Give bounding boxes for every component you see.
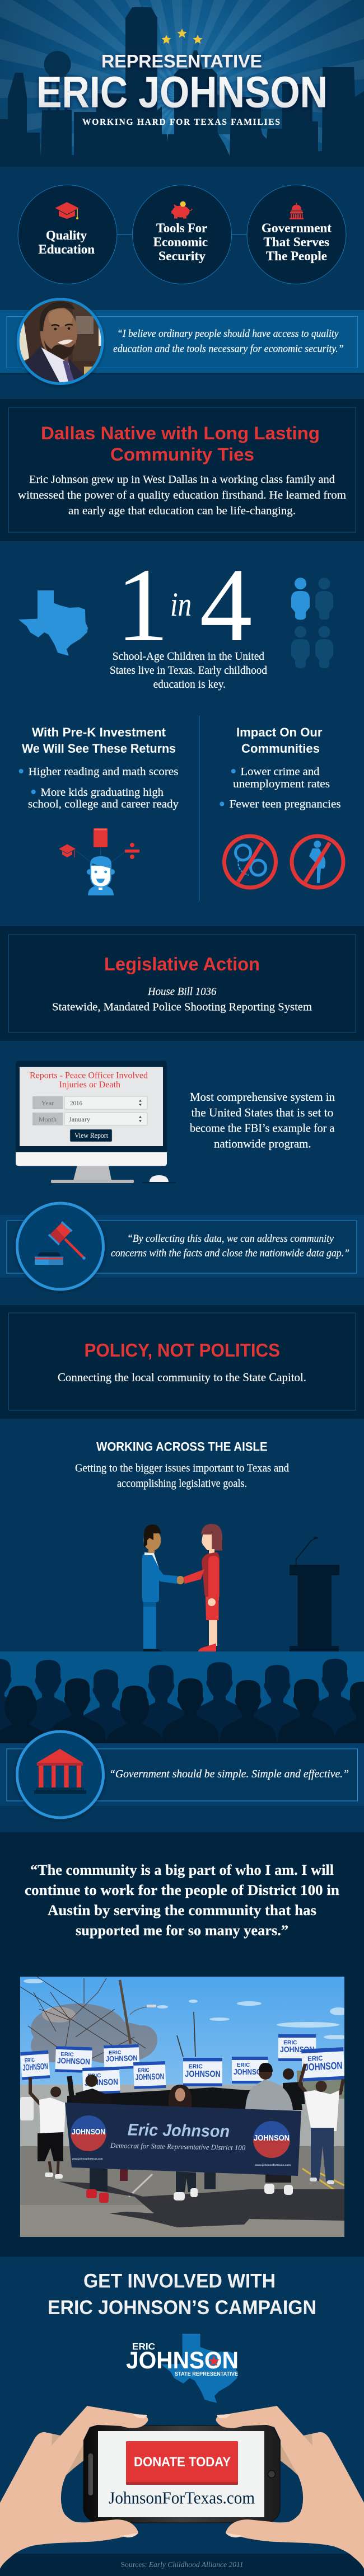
footer strip (0, 2554, 364, 2576)
pillar: government: That Serves (263, 235, 329, 249)
campaign yard signs: ERIC (189, 2063, 203, 2070)
panel: legislative action (0, 926, 364, 1041)
road shadows (59, 2181, 344, 2227)
text: most comprehensive system: nationwide program. (214, 1137, 311, 1151)
title: REPRESENTATIVE (101, 51, 262, 72)
biography text: an early age that education can be life-changing. (68, 505, 296, 517)
campaign yard signs: ERIC (109, 2049, 122, 2056)
statistic caption: School-Age Children in the United (113, 650, 264, 663)
icon: gavel (17, 1203, 103, 1289)
form fields: View Report (74, 1132, 108, 1139)
panel: community impact (220, 725, 343, 888)
bullet list: Higher reading and math scores (29, 766, 179, 778)
text: most comprehensive system (190, 1090, 335, 1151)
icon: capitol building (290, 203, 304, 219)
quote band: data: “By collecting this data, we can address community (127, 1233, 334, 1245)
bullet list (19, 766, 179, 810)
quote text: supported me for so many years.” (76, 1922, 288, 1939)
banner: JOHNSON (254, 2133, 290, 2143)
heading (236, 725, 323, 756)
quote text: Austin by serving the community that has (48, 1902, 316, 1918)
banner (65, 2103, 301, 2176)
pillar: economic security: Economic (153, 235, 208, 249)
woman (184, 1524, 222, 1652)
quote band: opportunity: “I believe ordinary people should have access to quality (117, 329, 339, 340)
bullet list: Lower crime and (241, 766, 319, 778)
tree (20, 1977, 195, 2071)
banner: www.johnsonfortexas.com (254, 2164, 291, 2167)
heading: Legislative Action (104, 954, 260, 974)
photo: parade with campaign banner (20, 1977, 348, 2237)
panel: policy, not politics (0, 1305, 364, 1419)
quote band: government (0, 1743, 364, 1806)
panel: pre-k returns (19, 725, 179, 895)
icon: graduation cap (54, 202, 80, 219)
heading: get involved (48, 2270, 316, 2319)
pillar: economic security (132, 185, 232, 284)
heading: Impact On Our (236, 725, 323, 739)
statistic caption (110, 650, 267, 691)
man (142, 1524, 184, 1653)
source line: Sources: Early Childhood Alliance 2011 (121, 2560, 244, 2569)
bullet list: Fewer teen pregnancies (230, 798, 341, 810)
logo: eric johnson state representative: ERIC (132, 2342, 155, 2352)
bill text: Statewide, Mandated Police Shooting Reporting System (52, 1001, 312, 1013)
campaign yard signs: ERIC (87, 2073, 101, 2080)
heading: Community Ties (110, 444, 254, 464)
icon: no pregnancy (292, 836, 343, 888)
stars (161, 29, 203, 44)
text: bigger issues (75, 1463, 289, 1490)
quote band: opportunity: education and the tools necessary for economic security.” (113, 344, 344, 355)
quote text: “The community is a big part of who I am. I will (30, 1862, 334, 1878)
illustration: desktop computer with report form (16, 1061, 176, 1183)
icon: government building (17, 1732, 103, 1818)
skyline (0, 7, 364, 167)
campaign yard signs: JOHNSON (22, 2061, 48, 2072)
statistic caption: States live in Texas. Early childhood (110, 664, 267, 677)
campaign yard signs: JOHNSON (105, 2053, 138, 2063)
text: most comprehensive system: the United States that is set to (192, 1106, 333, 1119)
campaign yard signs: ERIC (24, 2057, 35, 2063)
banner: Eric Johnson (127, 2120, 230, 2141)
bullet list: More kids graduating high (40, 786, 164, 799)
donate button (126, 2441, 238, 2485)
left hand (0, 2406, 148, 2576)
illustration: handshake (142, 1524, 222, 1653)
quote band: data: concerns with the facts and close the nationwide data gap.” (111, 1248, 349, 1259)
screen heading: Reports - Peace Officer Involved (30, 1071, 148, 1080)
campaign yard signs: JOHNSON (57, 2057, 90, 2067)
quote band: government: “Government should be simple. Simple and effective.” (109, 1768, 349, 1780)
right hand (216, 2406, 364, 2576)
icon: texas map (18, 590, 88, 656)
heading: working across the aisle: WORKING ACROSS THE AISLE (96, 1440, 268, 1454)
icon: four people, one highlighted (291, 578, 333, 668)
campaign yard signs: ERIC (307, 2054, 323, 2063)
portrait (17, 299, 103, 386)
heading (41, 423, 320, 464)
heading (22, 725, 176, 756)
form fields: Month (39, 1116, 57, 1123)
heading: Dallas Native with Long Lasting (41, 423, 320, 443)
icon: piggy bank (171, 201, 192, 218)
banner: Democrat for State Representative District 100 (110, 2141, 246, 2152)
title: ERIC JOHNSON (36, 67, 328, 116)
heading: get involved: GET INVOLVED WITH (83, 2270, 276, 2292)
campaign yard signs: ERIC (138, 2067, 150, 2073)
campaign yard signs: ERIC (283, 2040, 297, 2046)
heading: Communities (241, 742, 320, 756)
hero banner (0, 0, 364, 167)
heading: get involved: ERIC JOHNSON’S CAMPAIGN (48, 2297, 316, 2319)
donate button: DONATE TODAY (134, 2455, 231, 2470)
pillar: government: The People (266, 249, 327, 263)
illustration: audience silhouettes (0, 1659, 364, 1743)
bullet list (220, 766, 341, 810)
illustration: phone held in two hands (0, 2406, 364, 2576)
panel: community quote (0, 1832, 364, 2256)
pillar: economic security: Security (158, 249, 206, 263)
pillar: economic security: Tools For (156, 221, 207, 235)
form fields: 2016 (70, 1100, 82, 1107)
subheading: Connecting the local community to the State Capitol. (58, 1371, 306, 1384)
screen heading (30, 1071, 148, 1090)
stage (0, 1651, 364, 1743)
pillar: quality education (18, 185, 117, 284)
campaign yard signs: JOHNSON (85, 2077, 118, 2088)
campaign yard signs: JOHNSON (234, 2068, 267, 2077)
bill text (52, 986, 312, 1013)
banner: www.johnsonfortexas.com (72, 2157, 103, 2161)
bullet list: unemployment rates (233, 778, 330, 790)
campaign yard signs (20, 2034, 345, 2095)
pillar: government (247, 185, 346, 284)
title (36, 51, 328, 116)
phone (83, 2425, 280, 2523)
statistic: 1 in 4: 4 (199, 546, 252, 663)
quote band: data (0, 1215, 364, 1278)
logo: eric johnson state representative: STATE REPRESENTATIVE (175, 2371, 238, 2377)
text: bigger issues: Getting to the bigger issues important to Texas and (75, 1463, 289, 1474)
pillar: government: Government (262, 221, 332, 235)
form fields (32, 1096, 147, 1142)
pillar: quality education: Education (38, 242, 95, 256)
text: most comprehensive system: Most comprehensive system in (190, 1090, 335, 1104)
campaign yard signs: JOHNSON (185, 2070, 221, 2079)
biography text (18, 473, 346, 517)
street background (20, 2085, 344, 2146)
pillar: quality education: Quality (46, 228, 87, 242)
icon: child thinking (58, 828, 139, 895)
biography text: witnessed the power of a quality education firsthand. He learned from (18, 489, 346, 501)
logo: eric johnson state representative (126, 2334, 239, 2403)
text: most comprehensive system: become the FBI’s example for a (190, 1122, 335, 1135)
quote text: continue to work for the people of District 100 in (25, 1882, 340, 1898)
biography text: Eric Johnson grew up in West Dallas in a working class family and (29, 473, 335, 486)
heading: We Will See These Returns (22, 742, 176, 756)
statistic: 1 in 4 (116, 546, 252, 663)
three pillars (18, 185, 346, 284)
statistic caption: education is key. (153, 678, 226, 691)
bill text: House Bill 1036 (147, 986, 216, 998)
icon: no handcuffs (224, 836, 276, 888)
website: JohnsonForTexas.com (109, 2488, 255, 2507)
campaign yard signs: JOHNSON (280, 2045, 314, 2054)
text: bigger issues: accomplishing legislative goals. (117, 1478, 247, 1490)
bullet list: school, college and career ready (28, 798, 179, 810)
screen heading: Injuries or Death (59, 1080, 120, 1090)
panel: 1 in 4 statistic (18, 546, 333, 691)
campaign yard signs: JOHNSON (135, 2071, 164, 2082)
campaign yard signs: ERIC (237, 2062, 250, 2068)
marchers (30, 2063, 343, 2203)
statistic: 1 in 4: in (170, 586, 192, 623)
heading: With Pre-K Investment (32, 725, 166, 739)
form fields: Year (41, 1100, 54, 1107)
statistic: 1 in 4: 1 (116, 546, 169, 663)
illustration: podium (290, 1537, 339, 1651)
banner: JOHNSON (72, 2127, 105, 2137)
quote text (25, 1862, 340, 1939)
heading: POLICY, NOT POLITICS (84, 1340, 280, 1360)
form fields: January (69, 1116, 90, 1123)
campaign yard signs: ERIC (60, 2052, 74, 2058)
tagline: WORKING HARD FOR TEXAS FAMILIES (82, 118, 280, 127)
panel: dallas native (0, 399, 364, 541)
logo: eric johnson state representative: JOHNSON (126, 2347, 239, 2374)
quote band: opportunity (0, 310, 364, 374)
campaign yard signs: JOHNSON (304, 2059, 343, 2073)
